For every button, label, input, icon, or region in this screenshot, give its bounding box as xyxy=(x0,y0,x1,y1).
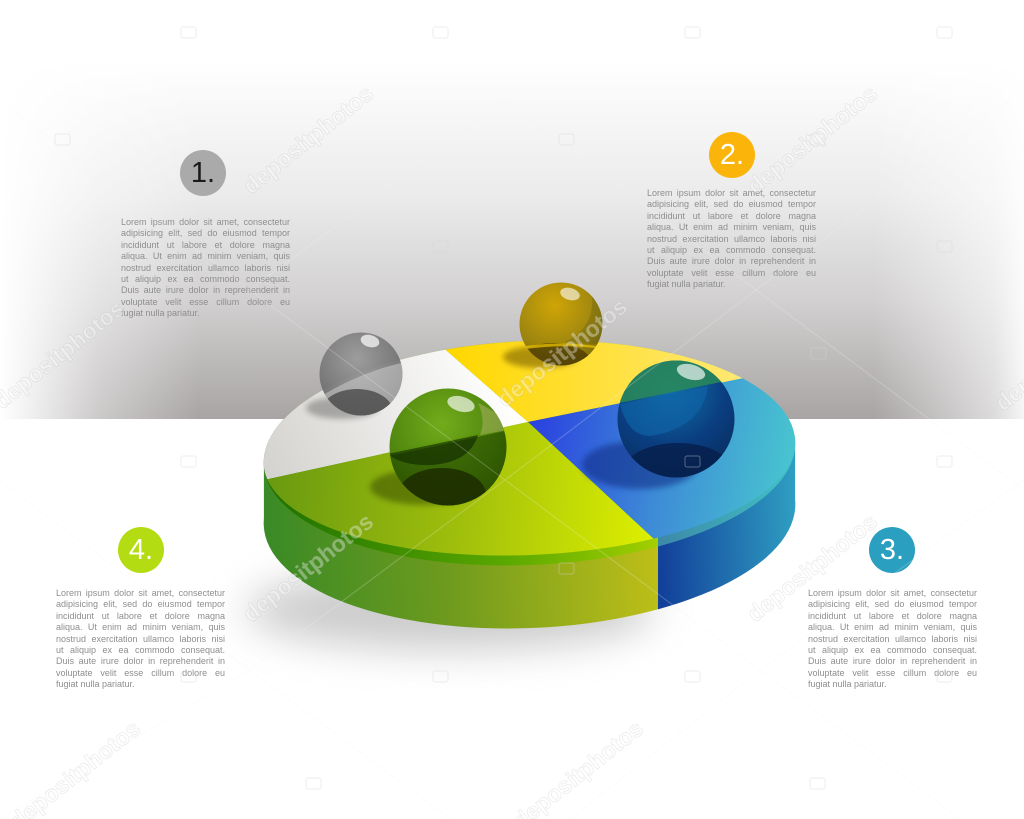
shadow: yellow sphere xyxy=(503,346,577,368)
text block 1: fugiat nulla pariatur. xyxy=(121,308,200,318)
watermark text: depositphotos xyxy=(742,508,882,627)
badge 1: 1. xyxy=(191,157,215,189)
segment 4: green xyxy=(267,422,654,556)
floor shadow xyxy=(245,570,655,650)
text block 3: ut aliquip ex ea commodo consequat. xyxy=(808,645,977,655)
shadow: blue sphere xyxy=(582,441,698,489)
shadow: green sphere xyxy=(370,469,480,505)
text block 3: Lorem ipsum dolor sit amet, consectetur xyxy=(808,588,977,598)
segment 1: white xyxy=(264,350,528,480)
text block 1: nostrud exercitation ullamco laboris nisi xyxy=(121,263,290,273)
text block 3: voluptate velit esse cillum dolore eu xyxy=(808,668,977,678)
watermark text: depositphotos xyxy=(742,80,882,199)
badge 2: 2. xyxy=(720,139,744,171)
text block 4: fugiat nulla pariatur. xyxy=(56,679,135,689)
text block 4: voluptate velit esse cillum dolore eu xyxy=(56,668,225,678)
text block 2: voluptate velit esse cillum dolore eu xyxy=(647,268,816,278)
text block 1: voluptate velit esse cillum dolore eu xyxy=(121,297,290,307)
text block 1: ut aliquip ex ea commodo consequat. xyxy=(121,274,290,284)
text block 3: aliqua. Ut enim ad minim veniam, quis xyxy=(808,622,977,632)
text block 2: Duis aute irure dolor in reprehenderit in xyxy=(647,256,816,266)
text block 2: adipisicing elit, sed do eiusmod tempor xyxy=(647,199,816,209)
pie side: blue segment xyxy=(658,444,796,610)
background: gray wall xyxy=(0,0,1024,419)
watermark text: depositphotos xyxy=(238,80,378,199)
text block 4: aliqua. Ut enim ad minim veniam, quis xyxy=(56,622,225,632)
text block 3: Duis aute irure dolor in reprehenderit in xyxy=(808,656,977,666)
text block 2: nostrud exercitation ullamco laboris nisi xyxy=(647,234,816,244)
sphere: gray xyxy=(320,332,402,416)
watermark text: depositphotos xyxy=(238,508,378,627)
text block 3: fugiat nulla pariatur. xyxy=(808,679,887,689)
text block 1: Duis aute irure dolor in reprehenderit in xyxy=(121,285,290,295)
segment 3: blue xyxy=(528,378,796,539)
text block 2: incididunt ut labore et dolore magna xyxy=(647,211,816,221)
pie chart xyxy=(264,341,796,628)
sphere: yellow xyxy=(520,282,602,366)
text block 4: Duis aute irure dolor in reprehenderit in xyxy=(56,656,225,666)
badge 1 xyxy=(180,150,226,196)
text block 4: ut aliquip ex ea commodo consequat. xyxy=(56,645,225,655)
text block 2: aliqua. Ut enim ad minim veniam, quis xyxy=(647,222,816,232)
text block 4: incididunt ut labore et dolore magna xyxy=(56,611,225,621)
pie side: green segment xyxy=(264,464,658,628)
text block 2: fugiat nulla pariatur. xyxy=(647,279,726,289)
segment 2: yellow xyxy=(446,341,742,422)
text block 4 xyxy=(56,588,225,689)
badge 3: 3. xyxy=(880,534,904,566)
text block 3 xyxy=(808,588,977,689)
text block 2 xyxy=(647,188,816,289)
pie rim: blue xyxy=(658,350,796,546)
text block 1: aliqua. Ut enim ad minim veniam, quis xyxy=(121,251,290,261)
pie top faces xyxy=(264,341,796,556)
sphere shadows on pie xyxy=(306,346,698,505)
text block 4: nostrud exercitation ullamco laboris nisi xyxy=(56,634,225,644)
text block 1: incididunt ut labore et dolore magna xyxy=(121,240,290,250)
text block 1: adipisicing elit, sed do eiusmod tempor xyxy=(121,228,290,238)
text block 4: Lorem ipsum dolor sit amet, consectetur xyxy=(56,588,225,598)
sphere: blue xyxy=(618,360,734,478)
text block 2: Lorem ipsum dolor sit amet, consectetur xyxy=(647,188,816,198)
text block 1 xyxy=(121,217,290,318)
text block 3: incididunt ut labore et dolore magna xyxy=(808,611,977,621)
sphere: green xyxy=(390,388,506,506)
watermark text: depositphotos xyxy=(492,293,632,412)
chart: 3D pie with spheres and background xyxy=(17,115,1024,669)
badge 4 xyxy=(118,527,164,573)
shadow: gray sphere xyxy=(306,397,378,419)
text block 3: nostrud exercitation ullamco laboris nisi xyxy=(808,634,977,644)
text block 2: ut aliquip ex ea commodo consequat. xyxy=(647,245,816,255)
text block 4: adipisicing elit, sed do eiusmod tempor xyxy=(56,599,225,609)
badge 4: 4. xyxy=(129,534,153,566)
badge 3 xyxy=(869,527,915,573)
text block 3: adipisicing elit, sed do eiusmod tempor xyxy=(808,599,977,609)
badge 2 xyxy=(709,132,755,178)
pie rim: green xyxy=(264,341,658,566)
text block 1: Lorem ipsum dolor sit amet, consectetur xyxy=(121,217,290,227)
